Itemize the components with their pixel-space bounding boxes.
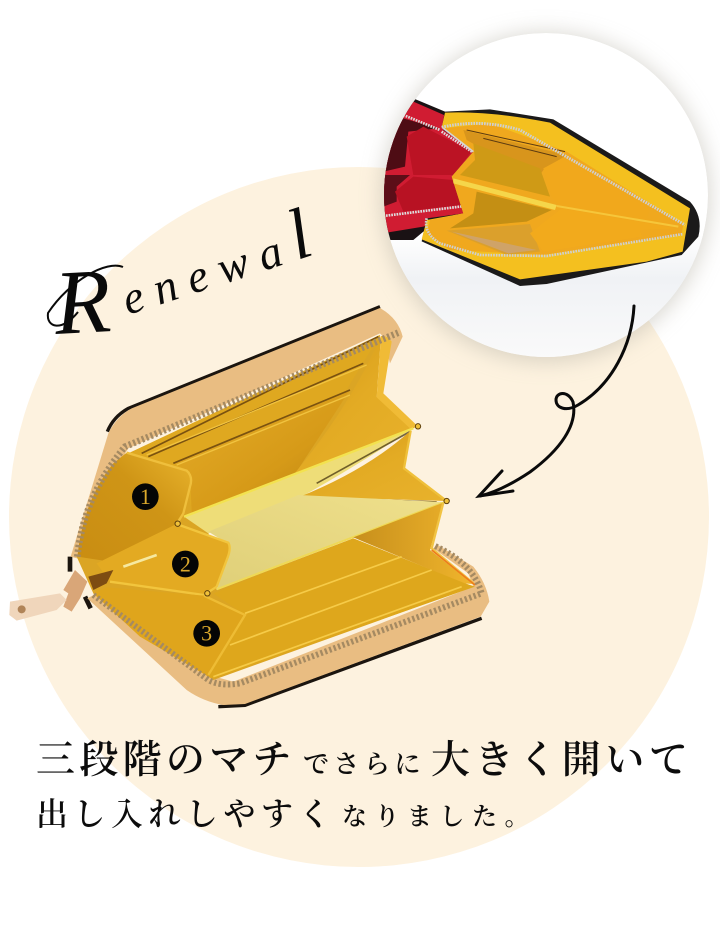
yellow wallet interior (427, 123, 683, 255)
lower gusset (353, 503, 473, 584)
headline line 1: でさらに (303, 750, 425, 779)
number badge 1 (132, 483, 159, 510)
light yellow lining (208, 495, 443, 590)
upper zipper (77, 333, 398, 557)
yellow wallet black shell (422, 109, 700, 286)
number badge 2: 2 (180, 551, 191, 576)
inset photo circle: red and yellow wallets (380, 33, 710, 360)
inset circle shadow (382, 33, 710, 361)
light yellow divider strip (184, 428, 413, 533)
upper gusset (293, 336, 418, 475)
wallet tan lower band (87, 544, 489, 705)
wallet tan upper band (71, 308, 403, 558)
number badge 3 (193, 620, 220, 647)
script heading: Renewal: R (51, 249, 113, 354)
script heading: Renewal (48, 193, 321, 354)
pocket 1 (77, 453, 191, 561)
wallet black edges (70, 307, 482, 707)
lower zipper (93, 546, 482, 684)
script heading: Renewal: enewal (108, 193, 321, 330)
back card pockets (128, 335, 380, 517)
background circle (9, 167, 709, 867)
number badge 3: 3 (201, 621, 212, 646)
pocket 3 (93, 587, 245, 677)
middle gusset (300, 431, 447, 501)
headline line 2: なりました。 (342, 804, 537, 831)
number badge 2 (172, 551, 199, 577)
wallet interior backing (77, 335, 473, 680)
gusset rivets (175, 424, 449, 596)
arrow from inset to wallet (479, 306, 634, 496)
yellow wallet zippers (442, 123, 685, 225)
zipper pull (9, 570, 113, 621)
headline line 1: 大きく開いて (431, 739, 693, 782)
front card pockets (207, 538, 475, 678)
main wallet photo (9, 307, 489, 707)
headline line 1: 三段階のマチ (36, 739, 296, 782)
red wallet behind (380, 98, 477, 240)
pocket 2 (97, 524, 230, 595)
number badge 1: 1 (140, 484, 151, 509)
yellow wallet leather (422, 112, 690, 279)
headline line 2: 出し入れしやすく (36, 796, 336, 832)
